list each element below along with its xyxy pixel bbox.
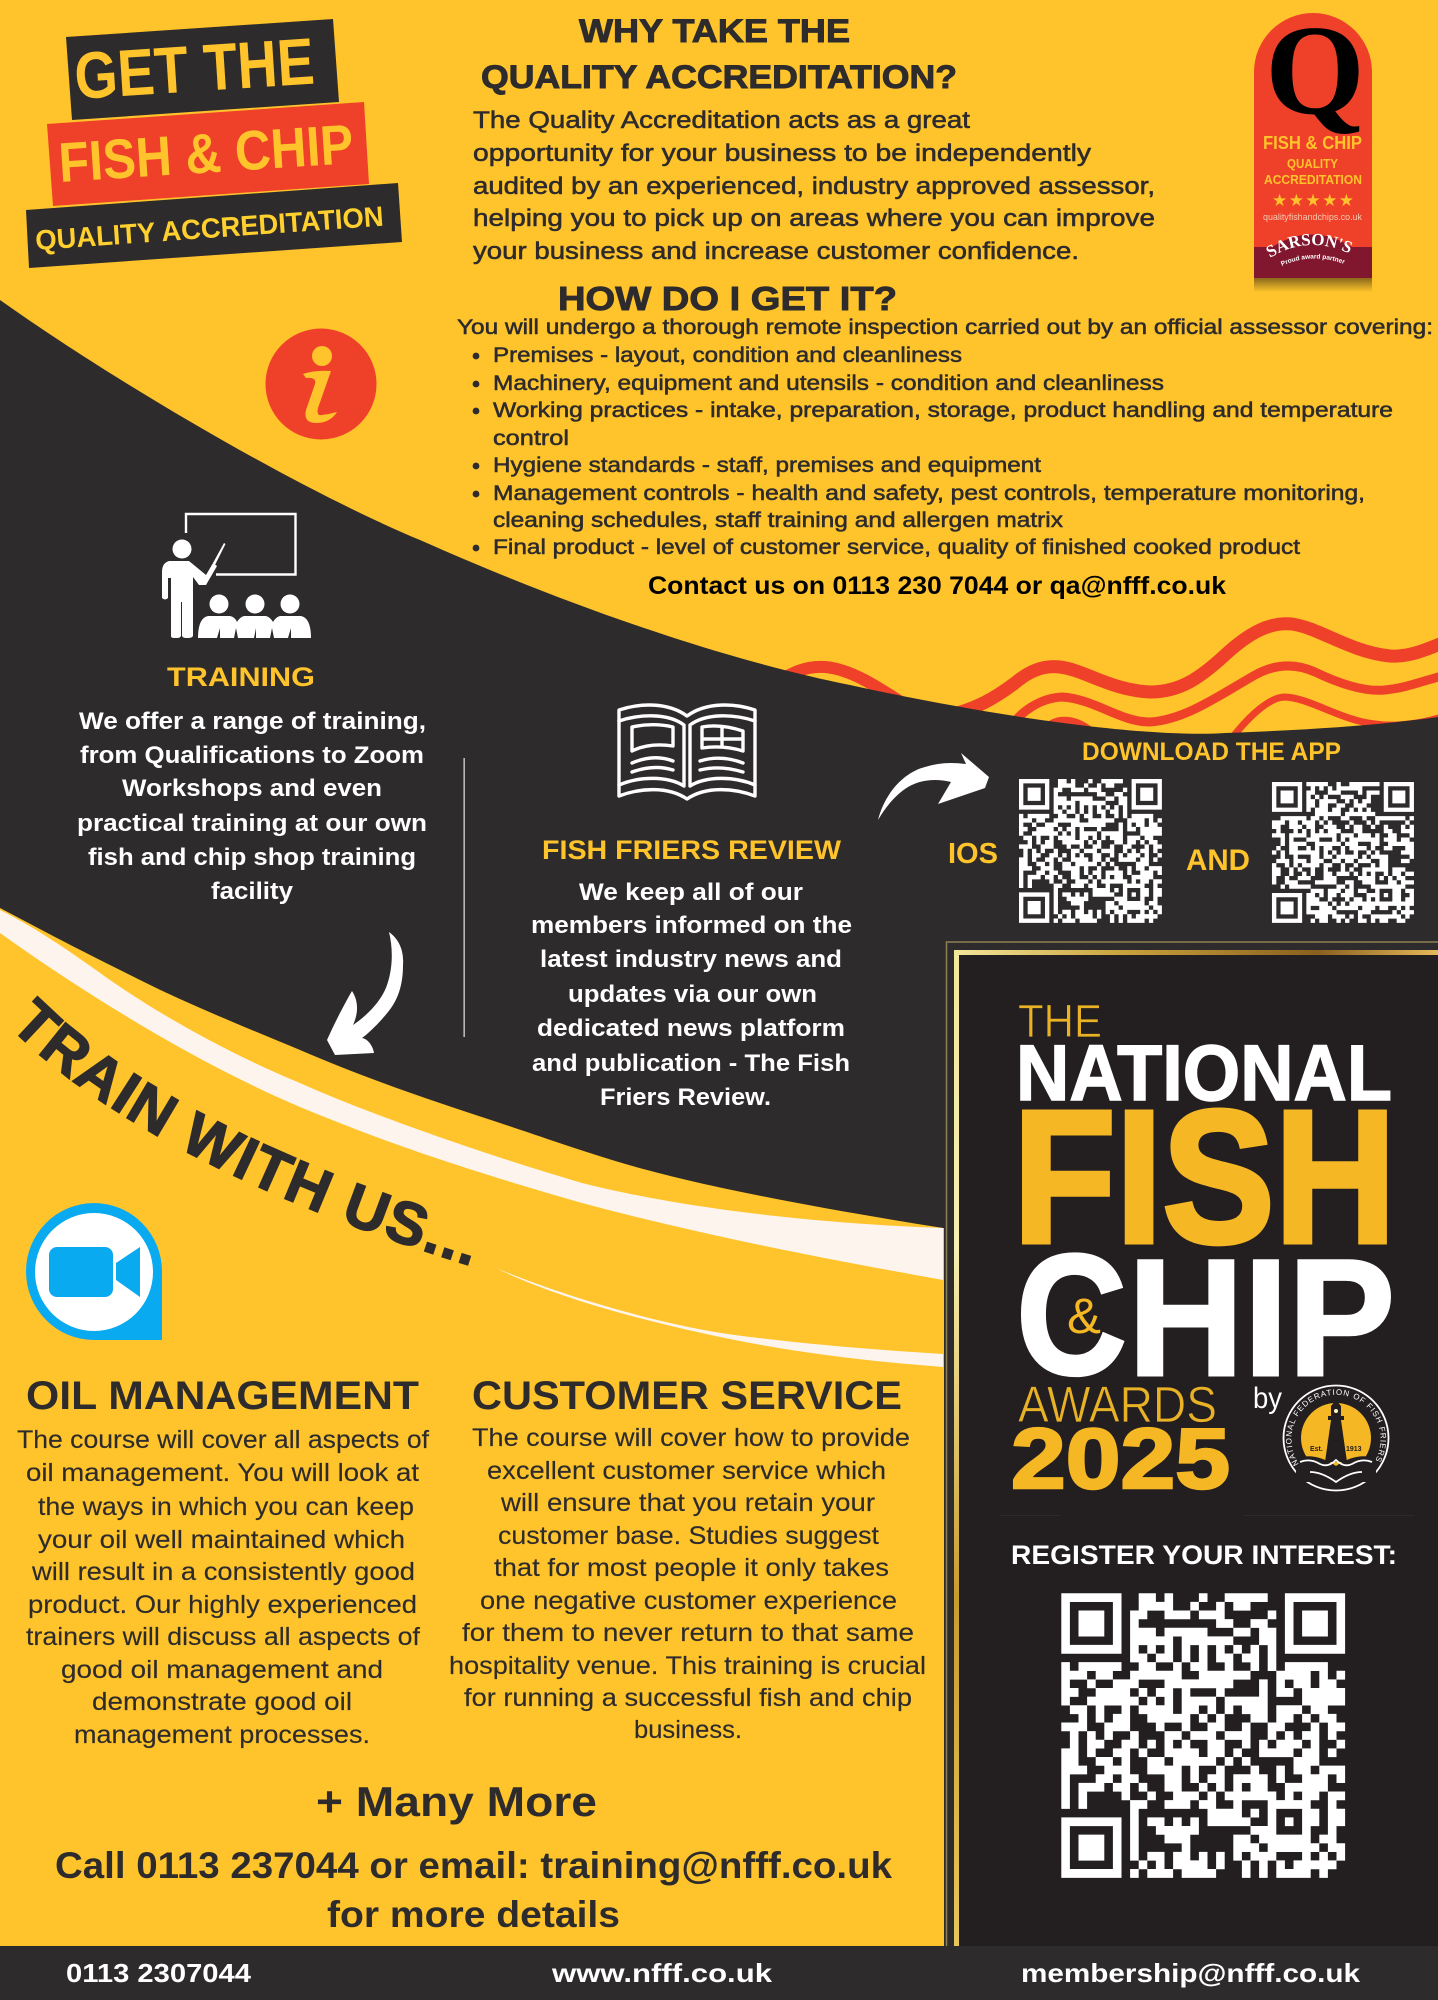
awards logo wordmark: AWARDS (1018, 1376, 1217, 1433)
title block: get the fish and chip quality accreditation: FISH & CHIP (57, 112, 355, 194)
awards logo wordmark: THE (1018, 995, 1102, 1047)
section: customer service: for running a successful fish and chip (464, 1684, 912, 1712)
section: oil management: your oil well maintained which (38, 1526, 405, 1554)
qr code: ios app (1019, 781, 1162, 921)
awards logo wordmark: by (1253, 1382, 1282, 1415)
title block: get the fish and chip quality accreditation: QUALITY ACCREDITATION (34, 201, 385, 256)
panel: national fish and chip awards (944, 941, 1438, 1946)
section: training: Workshops and even (122, 775, 382, 802)
section: download the app: AND (1186, 844, 1250, 877)
title block: get the fish and chip quality accreditation: GET THE (72, 24, 316, 113)
section: training: TRAINING (167, 662, 315, 692)
white swoosh band (0, 910, 943, 1280)
awards logo wordmark: FISH (1013, 1072, 1396, 1283)
text block: inspection bullet list: Final product - level of customer service, quality of finished cooked product (493, 535, 1300, 559)
text block: inspection bullet list: Management controls - health and safety, pest controls, temperature monitoring, (493, 481, 1365, 505)
section: customer service (449, 1374, 926, 1744)
section: training: facility (211, 878, 294, 905)
text block: accreditation intro: your business and increase customer confidence. (473, 238, 1079, 265)
section: training (77, 662, 427, 905)
badge: Q fish and chip quality accreditation: Q (1265, 0, 1365, 141)
section: customer service: one negative customer experience (480, 1587, 897, 1615)
awards logo wordmark: C (1016, 1219, 1127, 1411)
section: fish friers review: updates via our own (568, 981, 817, 1008)
section: oil management: product. Our highly experienced (28, 1591, 417, 1619)
section: download the app (948, 738, 1341, 921)
heading: why take the quality accreditation (481, 13, 957, 95)
section: oil management: OIL MANAGEMENT (26, 1374, 419, 1418)
badge: Q fish and chip quality accreditation: ★★★★★ (1272, 191, 1354, 211)
section: fish friers review: Friers Review. (600, 1084, 771, 1111)
text block: inspection bullet list (457, 315, 1433, 559)
footer bar: membership@nfff.co.uk (1021, 1958, 1361, 1988)
text: many more: + Many More (316, 1778, 597, 1825)
footer bar: www.nfff.co.uk (551, 1958, 773, 1988)
section: fish friers review: members informed on the (531, 912, 852, 939)
section: customer service: The course will cover how to provide (472, 1424, 910, 1452)
text block: inspection bullet list: Hygiene standards - staff, premises and equipment (493, 453, 1041, 477)
badge: Q fish and chip quality accreditation: FISH & CHIP (1263, 133, 1362, 153)
section: training: from Qualifications to Zoom (80, 742, 424, 769)
section: training: We offer a range of training, (79, 708, 426, 735)
section: fish friers review: latest industry news and (540, 946, 842, 973)
text block: inspection bullet list: cleaning schedules, staff training and allergen matrix (493, 508, 1063, 532)
badge: Q fish and chip quality accreditation: ACCREDITATION (1264, 172, 1362, 187)
badge: Q fish and chip quality accreditation (1254, 0, 1372, 291)
section: oil management: The course will cover all aspects of (17, 1426, 429, 1454)
heading: why take the quality accreditation: WHY TAKE THE (579, 13, 850, 49)
heading: how do i get it: HOW DO I GET IT? (558, 280, 897, 317)
section: customer service: hospitality venue. This training is crucial (449, 1652, 926, 1680)
section: customer service: that for most people it only takes (494, 1554, 889, 1582)
section: fish friers review: FISH FRIERS REVIEW (542, 835, 842, 865)
badge: Q fish and chip quality accreditation: QUALITY (1287, 156, 1338, 171)
logo: national federation of fish friers: Est. (1310, 1446, 1323, 1453)
call to action: training contact: Call 0113 237044 or email: training@nfff.co.uk (55, 1845, 892, 1886)
text block: inspection bullet list: Machinery, equipment and utensils - condition and cleanliness (493, 371, 1164, 395)
text block: accreditation intro (473, 107, 1155, 265)
section: fish friers review: dedicated news platform (537, 1015, 845, 1042)
section: customer service: for them to never return to that same (462, 1619, 914, 1647)
text block: accreditation intro: opportunity for your business to be independently (473, 140, 1091, 167)
qr code: register interest (1061, 1598, 1345, 1873)
icon: zoom video (26, 1203, 162, 1340)
logo: national federation of fish friers: 1913 (1346, 1446, 1362, 1453)
section: fish friers review: and publication - The Fish (532, 1050, 850, 1077)
section: customer service: excellent customer service which (487, 1457, 886, 1485)
badge: Q fish and chip quality accreditation: Proud award partners (1280, 254, 1346, 266)
badge: Q fish and chip quality accreditation: qualityfishandchips.co.uk (1263, 212, 1362, 223)
section: training: fish and chip shop training (88, 844, 416, 871)
text block: inspection bullet list: Premises - layout, condition and cleanliness (493, 343, 962, 367)
logo: national federation of fish friers: NATIONAL FEDERATION OF FISH FRIERS (1286, 1389, 1386, 1466)
section: oil management: the ways in which you can keep (38, 1493, 414, 1521)
section: oil management: management processes. (74, 1721, 370, 1749)
thin white swoosh (496, 1268, 943, 1367)
awards logo wordmark: NATIONAL (1016, 1028, 1392, 1117)
section: download the app: IOS (948, 838, 998, 870)
section: oil management: trainers will discuss all aspects of (26, 1623, 420, 1651)
badge: Q fish and chip quality accreditation: SARSON'S (1266, 234, 1352, 258)
awards logo wordmark: 2025 (1011, 1412, 1230, 1507)
arrow: to app download (878, 753, 989, 820)
dark curved band (0, 300, 1438, 1240)
section: fish friers review: We keep all of our (579, 879, 803, 906)
footer bar: 0113 2307044 (66, 1958, 252, 1988)
section: oil management: oil management. You will look at (26, 1459, 419, 1487)
awards logo wordmark (1011, 995, 1396, 1507)
arrow: down to train with us (327, 932, 403, 1055)
section: oil management: demonstrate good oil (92, 1688, 352, 1716)
call to action: training contact (55, 1845, 892, 1935)
icon: open magazine (619, 705, 755, 799)
icon: info (266, 328, 376, 440)
text block: inspection bullet list: You will undergo a thorough remote inspection carried out by an official assessor covering: (457, 315, 1433, 339)
section: oil management: good oil management and (61, 1656, 383, 1684)
section: download the app: DOWNLOAD THE APP (1082, 738, 1341, 766)
title block: get the fish and chip quality accreditation (26, 19, 402, 268)
section: oil management (17, 1374, 429, 1749)
section: fish friers review (531, 835, 852, 1111)
section: customer service: business. (634, 1716, 742, 1744)
icon: trainer and class (162, 514, 311, 638)
heading: why take the quality accreditation: QUALITY ACCREDITATION? (481, 59, 957, 95)
awards logo wordmark: & (1067, 1288, 1101, 1344)
text block: accreditation intro: The Quality Accreditation acts as a great (473, 107, 970, 134)
call to action: training contact: for more details (327, 1894, 620, 1935)
decorative red wavy stripes (778, 624, 1438, 738)
section: oil management: will result in a consistently good (31, 1558, 415, 1586)
contact line: Contact us on 0113 230 7044 or qa@nfff.co.uk (648, 572, 1226, 600)
section: customer service: customer base. Studies suggest (498, 1522, 879, 1550)
text block: accreditation intro: audited by an experienced, industry approved assessor, (473, 173, 1155, 200)
footer bar (0, 1946, 1438, 2000)
section: customer service: CUSTOMER SERVICE (472, 1374, 902, 1418)
section: training: practical training at our own (77, 810, 427, 837)
text: register your interest: REGISTER YOUR INTEREST: (1011, 1540, 1397, 1570)
awards logo wordmark: HIP (1128, 1226, 1395, 1411)
text block: accreditation intro: helping you to pick up on areas where you can improve (473, 205, 1155, 232)
qr code: android app (1274, 782, 1412, 923)
text block: inspection bullet list: control (493, 426, 569, 450)
section: customer service: will ensure that you retain your (500, 1489, 875, 1517)
heading: train with us: TRAIN WITH US... (18, 996, 472, 1266)
text block: inspection bullet list: Working practices - intake, preparation, storage, product handling and temperature (493, 398, 1393, 422)
